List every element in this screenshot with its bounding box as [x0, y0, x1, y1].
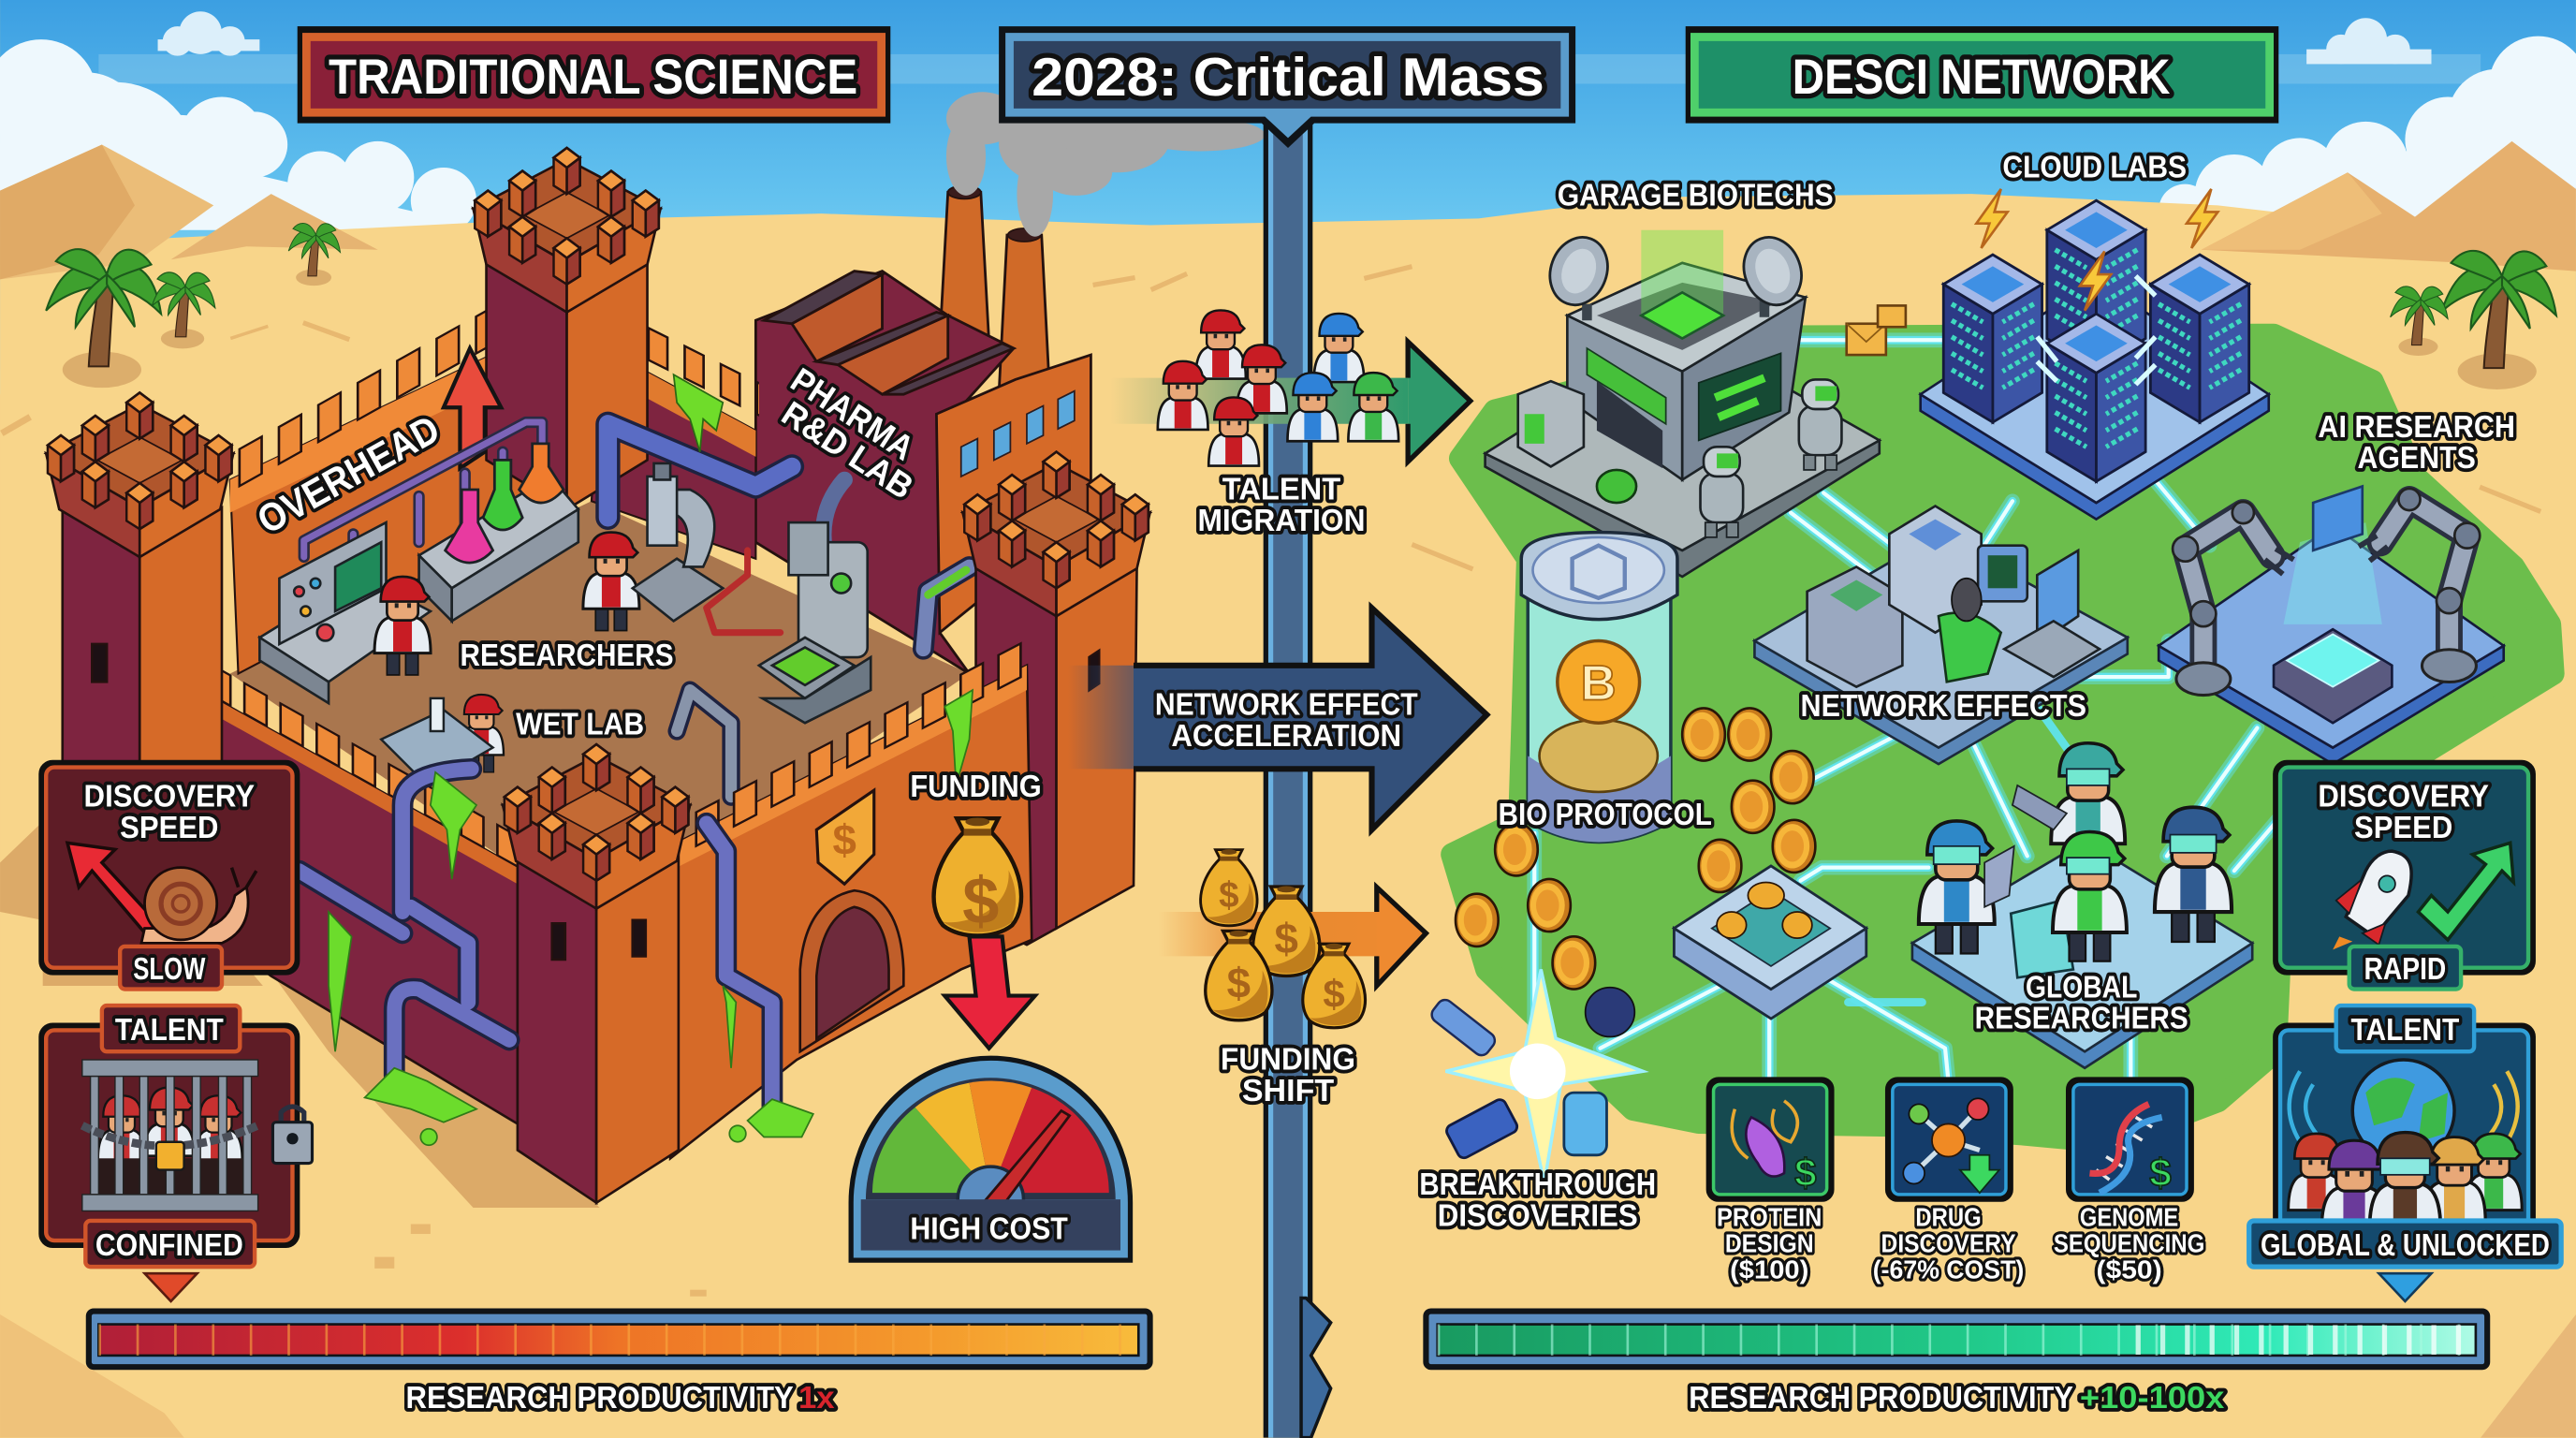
castle labels: PHARMA	[784, 360, 921, 468]
panel: discovery speed rapid	[2277, 764, 2532, 990]
robot arm	[677, 690, 731, 797]
left tower	[46, 392, 233, 920]
right scene labels: NETWORK EFFECTS	[1801, 689, 2086, 724]
label: research productivity 10-100x: RESEARCH PRODUCTIVITY	[1689, 1381, 2073, 1416]
progress bar: desci	[1426, 1312, 2487, 1367]
funding down arrow	[944, 936, 1035, 1049]
tag: confined: CONFINED	[95, 1228, 243, 1263]
palm trees: left	[46, 223, 341, 388]
labels: cost cards: DRUG	[1915, 1202, 1982, 1231]
pointer: left	[145, 1273, 198, 1301]
arrowhead outline: talent	[1408, 342, 1471, 462]
red tubing	[707, 550, 781, 633]
talent migration arrow	[1110, 378, 1408, 424]
labels: cost cards: GENOME	[2080, 1202, 2178, 1231]
front-left wall	[165, 670, 518, 1123]
header: desci network: DESCI NETWORK	[1793, 50, 2170, 105]
wet lab bench	[381, 698, 493, 785]
gauge: high cost: HIGH COST	[910, 1211, 1068, 1246]
arrowhead outline: funding	[1377, 888, 1426, 986]
side pipe with slime	[923, 566, 970, 649]
green slime	[329, 690, 973, 1145]
panel: discovery speed slow	[43, 764, 296, 990]
back-right wall	[592, 348, 755, 559]
bio protocol cylinder	[1521, 533, 1677, 842]
label: research productivity 1x: 1x	[798, 1381, 835, 1416]
center divider	[1264, 98, 1331, 1438]
green slime on wall	[674, 374, 723, 452]
researchers in lab	[374, 533, 639, 772]
flask table	[419, 477, 578, 621]
tag: talent: TALENT	[2351, 1013, 2459, 1048]
overhead arrow	[444, 348, 501, 468]
icon card: drug discovery	[1889, 1081, 2009, 1197]
label: funding shift: FUNDING	[1221, 1043, 1355, 1078]
label: research productivity 1x: RESEARCH PRODUCTIVITY	[406, 1381, 794, 1416]
icon: padlock	[272, 1107, 313, 1164]
pointer: right	[2378, 1273, 2431, 1301]
dunes: left	[0, 144, 378, 1438]
hub device	[1674, 866, 1866, 1019]
lightning bolts	[1976, 189, 2217, 311]
dunes: right	[2202, 141, 2576, 1438]
label: talent migration	[1197, 473, 1365, 538]
money bags	[1201, 849, 1366, 1028]
panel: discovery speed slow: SPEED	[120, 811, 218, 845]
progress bar: traditional	[89, 1312, 1150, 1367]
header: 2028 critical mass: 2028: Critical Mass	[1032, 48, 1544, 108]
cloud labs	[1921, 200, 2269, 520]
icon: snail	[141, 868, 256, 943]
money bags: $	[1323, 972, 1345, 1016]
shield: $	[832, 816, 856, 864]
icon card: protein design	[1710, 1081, 1830, 1197]
label: funding shift	[1221, 1043, 1355, 1108]
labels: cost cards: ($100)	[1730, 1255, 1808, 1284]
main blue pipe	[607, 424, 792, 518]
breakthrough burst	[1428, 969, 1643, 1183]
tag: rapid: RAPID	[2364, 952, 2446, 987]
AI research agents	[2159, 486, 2504, 764]
label: talent migration: MIGRATION	[1197, 504, 1365, 538]
icon: cage with researchers	[82, 1060, 258, 1211]
factory	[755, 271, 1090, 674]
network effects hub	[1754, 506, 2128, 764]
outer pipes	[299, 769, 772, 1112]
tag: talent	[102, 1005, 240, 1051]
door	[800, 890, 903, 1051]
tag: slow: SLOW	[133, 952, 206, 987]
back-left wall	[230, 337, 567, 674]
labels: cost cards	[1717, 1202, 2204, 1284]
labels: cost cards: DESIGN	[1725, 1228, 1814, 1257]
right tower	[963, 452, 1150, 945]
tag: talent: TALENT	[115, 1013, 224, 1048]
gauge: high cost	[851, 1058, 1131, 1260]
money bags: $	[1219, 875, 1239, 916]
sand specks	[0, 264, 2541, 1297]
header: traditional science: TRADITIONAL SCIENCE	[329, 50, 857, 105]
labels: cost cards: PROTEIN	[1717, 1202, 1822, 1231]
panel: talent confined	[43, 1005, 313, 1267]
coins	[1456, 708, 1815, 990]
castle labels: FUNDING	[910, 770, 1042, 804]
money bags: $	[1227, 959, 1251, 1006]
labels: cost cards: DISCOVERY	[1881, 1228, 2016, 1257]
funding money bag: $	[962, 863, 999, 937]
tag: talent	[2336, 1005, 2474, 1051]
icon: green trend arrow	[2418, 843, 2513, 940]
panel: discovery speed rapid: DISCOVERY	[2318, 780, 2489, 814]
network beams	[1534, 340, 2333, 1081]
smoke	[946, 92, 1265, 237]
front-right wall	[670, 666, 1032, 1158]
label: talent migration: TALENT	[1222, 473, 1340, 507]
icon: global researchers	[2289, 1133, 2522, 1229]
labels: cost cards: (-67% COST)	[1873, 1255, 2024, 1284]
right scene labels	[1419, 151, 2515, 1233]
microscope	[633, 463, 723, 621]
icon card: genome sequencing	[2070, 1081, 2190, 1197]
panel: discovery speed rapid: SPEED	[2354, 811, 2452, 845]
label: network effect acceleration: ACCELERATION	[1171, 719, 1401, 754]
panel: discovery speed slow: DISCOVERY	[84, 780, 255, 814]
right scene labels: AI RESEARCH	[2318, 410, 2515, 445]
clouds: right	[2152, 18, 2576, 237]
palm trees: right	[2391, 251, 2556, 389]
label: research productivity 10-100x: +10-100x	[2080, 1381, 2225, 1416]
panel: talent global	[2249, 1005, 2561, 1267]
icon: globe	[2290, 1060, 2518, 1162]
flasks	[446, 444, 564, 563]
front tower	[503, 744, 690, 1203]
right scene labels: AGENTS	[2358, 441, 2476, 476]
header: traditional science	[298, 26, 890, 124]
dithered horizon band	[98, 54, 2481, 84]
labels: cost cards: ($50)	[2096, 1255, 2162, 1284]
tag: slow	[120, 946, 222, 990]
funding money bag	[934, 817, 1021, 937]
icon: rocket	[2333, 851, 2411, 949]
castle labels: OVERHEAD	[250, 406, 446, 542]
arrowhead outline: network	[1134, 608, 1486, 829]
reactor machine	[759, 479, 871, 723]
label: network effect acceleration: NETWORK EFFECT	[1155, 687, 1418, 722]
icon card: protein design: $	[1794, 1151, 1817, 1195]
castle labels: WET LAB	[516, 707, 644, 741]
icon: red arrow	[67, 843, 158, 936]
network effect arrow	[1068, 608, 1486, 829]
back tower	[474, 148, 661, 509]
floor	[230, 501, 970, 862]
castle labels	[250, 360, 1042, 804]
envelopes	[1847, 305, 1906, 355]
right scene labels: DISCOVERIES	[1438, 1198, 1638, 1233]
header: 2028 critical mass	[999, 26, 1575, 148]
castle	[46, 148, 1150, 1203]
sky	[0, 0, 2576, 394]
lab console	[259, 522, 431, 703]
right scene labels: GARAGE BIOTECHS	[1558, 178, 1834, 213]
panel: DeSci island	[1453, 335, 2553, 1142]
label: funding shift: SHIFT	[1242, 1074, 1334, 1108]
tag: confined	[85, 1221, 255, 1267]
castle ground shadow	[0, 822, 600, 1208]
right scene labels: BREAKTHROUGH	[1419, 1167, 1656, 1202]
right scene labels: GLOBAL	[2026, 970, 2137, 1005]
chimneys	[940, 185, 1050, 394]
header: desci network	[1686, 26, 2278, 124]
garage biotechs	[1486, 229, 1880, 577]
icon card: genome sequencing: $	[2149, 1151, 2172, 1195]
clouds: left	[0, 11, 493, 246]
right scene labels: BIO PROTOCOL	[1499, 798, 1712, 832]
right scene labels: RESEARCHERS	[1975, 1002, 2188, 1036]
castle labels: R&D LAB	[775, 394, 920, 506]
labels: cost cards: SEQUENCING	[2054, 1228, 2204, 1257]
global researchers platform	[1912, 743, 2252, 1068]
funding shift arrow	[1158, 888, 1426, 986]
lab pipes	[304, 422, 542, 559]
bio protocol cylinder: B	[1581, 656, 1617, 712]
right scene labels: CLOUD LABS	[2002, 151, 2187, 185]
castle labels: RESEARCHERS	[460, 638, 674, 673]
migrating researchers	[1158, 310, 1398, 466]
label: network effect acceleration	[1155, 687, 1418, 754]
money bags: $	[1275, 915, 1298, 962]
shield	[816, 790, 874, 884]
